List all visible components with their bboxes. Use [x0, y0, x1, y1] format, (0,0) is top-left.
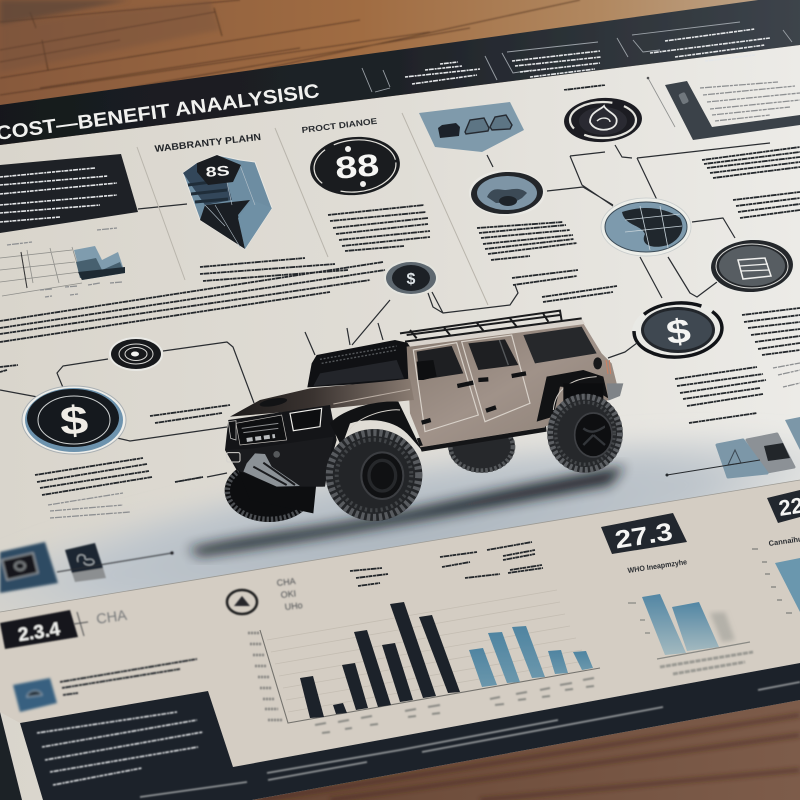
panels: bottom cards background [0, 480, 800, 767]
panel text [37, 712, 203, 785]
heading: warranty plan: WABBRANTY PLAHN [154, 132, 262, 155]
stat label CHA: CHA [95, 608, 128, 628]
text block beside vehicle circle [477, 222, 577, 260]
section divider line [0, 480, 800, 612]
icon: chart badge [227, 590, 257, 614]
stat box 27.3 [601, 513, 687, 554]
text block under gauge [328, 205, 430, 251]
connector from small dollar [428, 285, 518, 313]
tile: link icon [57, 543, 174, 582]
right blue chart [752, 549, 800, 613]
roof front and windshield frame [307, 340, 412, 387]
icon: small dollar circle [384, 260, 438, 296]
panel: intro dark box [0, 154, 187, 233]
door seams [413, 335, 530, 432]
tan body [407, 323, 617, 447]
header band [0, 0, 800, 145]
bumper and skid plate [225, 437, 333, 487]
text blocks right column [702, 147, 800, 218]
floor shading under the vehicle [0, 385, 800, 675]
lower sill and chassis [417, 417, 547, 452]
faint text mid right [773, 363, 800, 387]
text blocks center [512, 270, 617, 302]
stat tick [74, 612, 88, 636]
front fender [330, 402, 422, 450]
connector lines: upper right network [487, 143, 770, 298]
rear fender [537, 370, 608, 422]
far front wheel [225, 459, 317, 522]
stat box 22 [767, 490, 800, 523]
mirror [417, 360, 437, 380]
heading: project diagnosis: PROCT DIANOE [301, 116, 378, 135]
far rear wheel [448, 421, 515, 473]
icon: globe map circle [601, 198, 691, 256]
near front wheel [326, 429, 422, 521]
vertical dividers [137, 113, 637, 750]
icon: card tile [13, 678, 57, 712]
footer rules [140, 682, 800, 797]
icon: car badge circle [709, 238, 795, 294]
front fascia [225, 405, 337, 487]
blue bars [469, 626, 593, 687]
long text lines [0, 258, 385, 342]
black bars [300, 602, 460, 718]
blue mini bar chart [628, 594, 753, 674]
icon: large dollar circle left: $ [59, 398, 90, 444]
vehicle ground shadow [188, 466, 625, 556]
icon: blue vehicle banner [419, 102, 524, 152]
icon: score gauge 88 [308, 133, 402, 199]
near rear wheel [547, 394, 623, 473]
windshield and light bar [313, 360, 404, 386]
grid lines [267, 590, 590, 712]
icon: large dollar circle left [22, 386, 126, 454]
icon: swirl circle [563, 96, 643, 144]
chart legend labels: OKI [280, 588, 297, 600]
chart caption text [350, 542, 543, 586]
label above flame icon [564, 85, 605, 90]
header bracket marks [362, 22, 792, 92]
connectors: left network [0, 300, 390, 482]
icon: warranty shield: 8S [205, 162, 230, 180]
icon: warranty shield [183, 155, 272, 249]
stat box 2.3.4: 2.3.4 [17, 619, 62, 646]
chart legend labels: CHA [276, 576, 296, 588]
title: COST—BENEFIT ANAALYSISIC [0, 80, 321, 145]
y axis labels [248, 633, 282, 720]
icon: score gauge 88: 88 [334, 147, 381, 186]
bar chart [248, 590, 600, 733]
text lines above dark panel [60, 659, 197, 695]
vehicle illustration [225, 311, 623, 522]
icon: concentric target [109, 337, 163, 371]
icon: large dollar circle right: $ [664, 312, 693, 353]
connector to vehicle [608, 343, 637, 358]
door handles [422, 373, 526, 423]
icon tiles right [666, 417, 800, 477]
tile: monitor icon [0, 542, 58, 593]
windows [417, 346, 463, 380]
roof rack [400, 311, 582, 342]
header text blocks [405, 29, 770, 84]
faint text block lower left [48, 493, 130, 518]
roof edge highlight [407, 318, 585, 347]
x axis labels [315, 678, 594, 733]
icon: large dollar circle right [630, 298, 726, 362]
text blocks mid right [675, 308, 800, 423]
axes [260, 630, 600, 723]
chart legend labels [276, 576, 303, 612]
icon: vehicle circle [469, 170, 545, 216]
stat box 2.3.4 [0, 610, 78, 649]
label under 27.3: WHO Ineapmzyhe [627, 557, 688, 575]
text blocks left middle [0, 365, 230, 495]
small area chart [0, 228, 125, 297]
hood [230, 379, 414, 417]
stat box 27.3: 27.3 [613, 518, 675, 554]
rear bumper and lights [607, 383, 623, 401]
chart legend labels: UHo [284, 600, 303, 612]
footer and dark summary panel [0, 663, 800, 800]
panel: top-right note [647, 77, 800, 140]
icon: small dollar circle: $ [407, 271, 416, 288]
